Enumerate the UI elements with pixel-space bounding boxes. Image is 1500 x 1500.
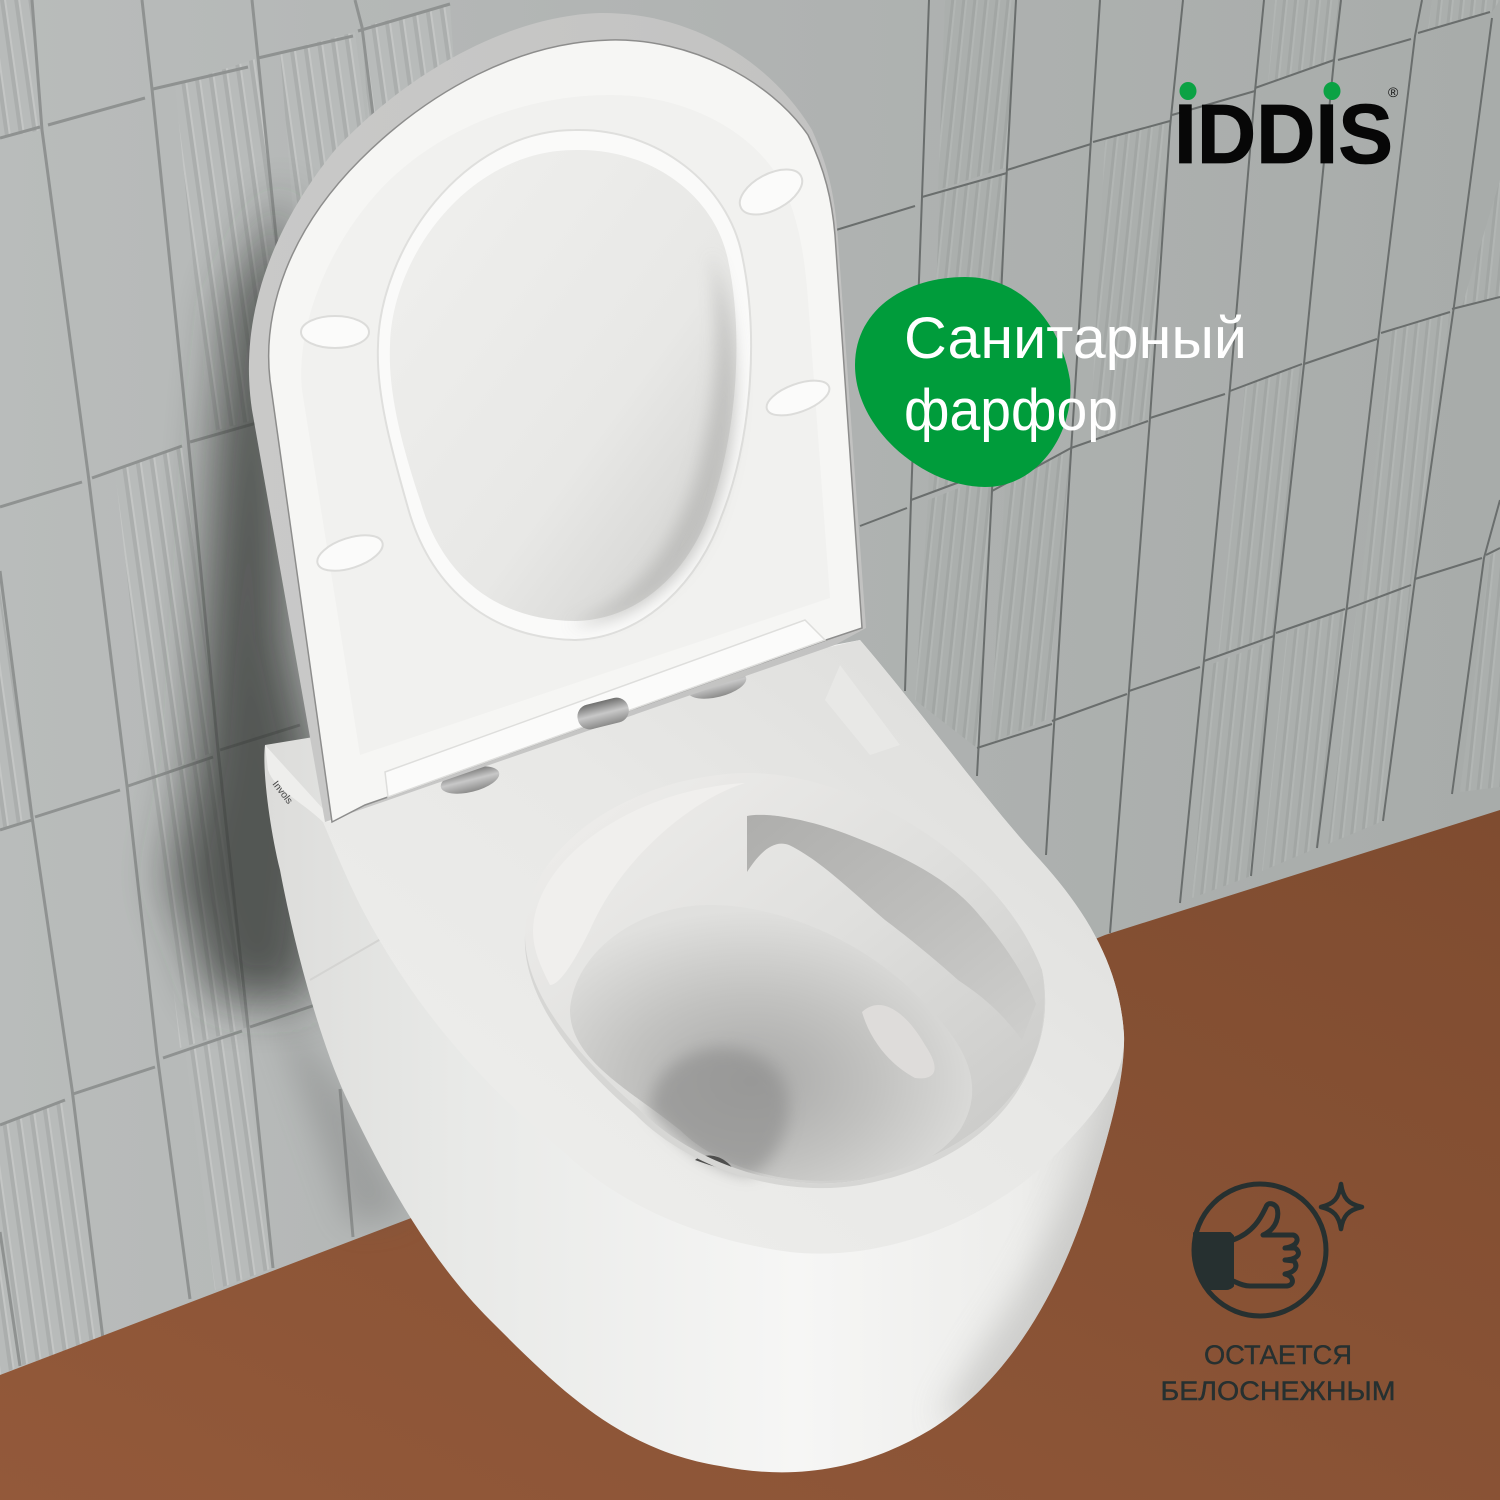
hole shadow <box>570 250 735 625</box>
drain <box>695 1156 735 1172</box>
grout lines <box>836 0 1500 933</box>
body shading right <box>940 1057 1124 1420</box>
seat underside panel <box>301 95 830 755</box>
bumper 3 <box>762 374 834 422</box>
icon: thumbs up with sparkle <box>1194 1184 1362 1316</box>
fluted tiles, right <box>915 0 1500 898</box>
caption: ОСТАЕТСЯ <box>1204 1340 1352 1370</box>
green blob badge <box>855 277 1070 487</box>
hinge posts <box>438 666 749 799</box>
ring around hole <box>378 130 751 640</box>
bowl body <box>264 640 1124 1472</box>
caption <box>1160 1340 1396 1406</box>
bumper 4 <box>313 528 387 578</box>
sparkle <box>1321 1184 1362 1229</box>
bumper 2 <box>733 160 809 224</box>
raised toilet seat <box>249 13 866 822</box>
body seam <box>310 925 405 980</box>
chrome button <box>575 695 631 732</box>
rim highlight <box>825 665 900 755</box>
cuff <box>1194 1233 1233 1289</box>
small brand mark: Invols <box>270 779 294 806</box>
heading <box>904 306 1247 443</box>
toilet <box>264 640 1140 1472</box>
heading: фарфор <box>904 378 1118 443</box>
floor <box>0 810 1500 1500</box>
basin <box>570 905 972 1181</box>
right shelf <box>747 815 1036 1040</box>
deck and rim <box>265 640 1124 1254</box>
fluted tiles, left <box>0 0 470 1375</box>
hand <box>1233 1204 1298 1286</box>
bumper 1 <box>301 316 369 348</box>
bowl opening <box>525 773 1045 1184</box>
rim front lip <box>525 935 1045 1188</box>
water trap shadow <box>650 1048 789 1175</box>
caption: БЕЛОСНЕЖНЫМ <box>1160 1376 1396 1406</box>
hinge bar <box>385 620 825 797</box>
glare <box>862 1005 935 1078</box>
seat shadow on wall <box>170 190 330 1000</box>
deck corner <box>265 745 335 822</box>
inner hole <box>390 150 736 621</box>
logo: ® <box>1388 84 1399 100</box>
seat back <box>249 13 866 822</box>
logo: IDDIS <box>1174 87 1393 181</box>
wall shadow under bowl <box>270 1000 410 1225</box>
heading: Санитарный <box>904 306 1247 371</box>
seat front <box>269 40 862 822</box>
left inner wall highlight <box>533 783 745 985</box>
